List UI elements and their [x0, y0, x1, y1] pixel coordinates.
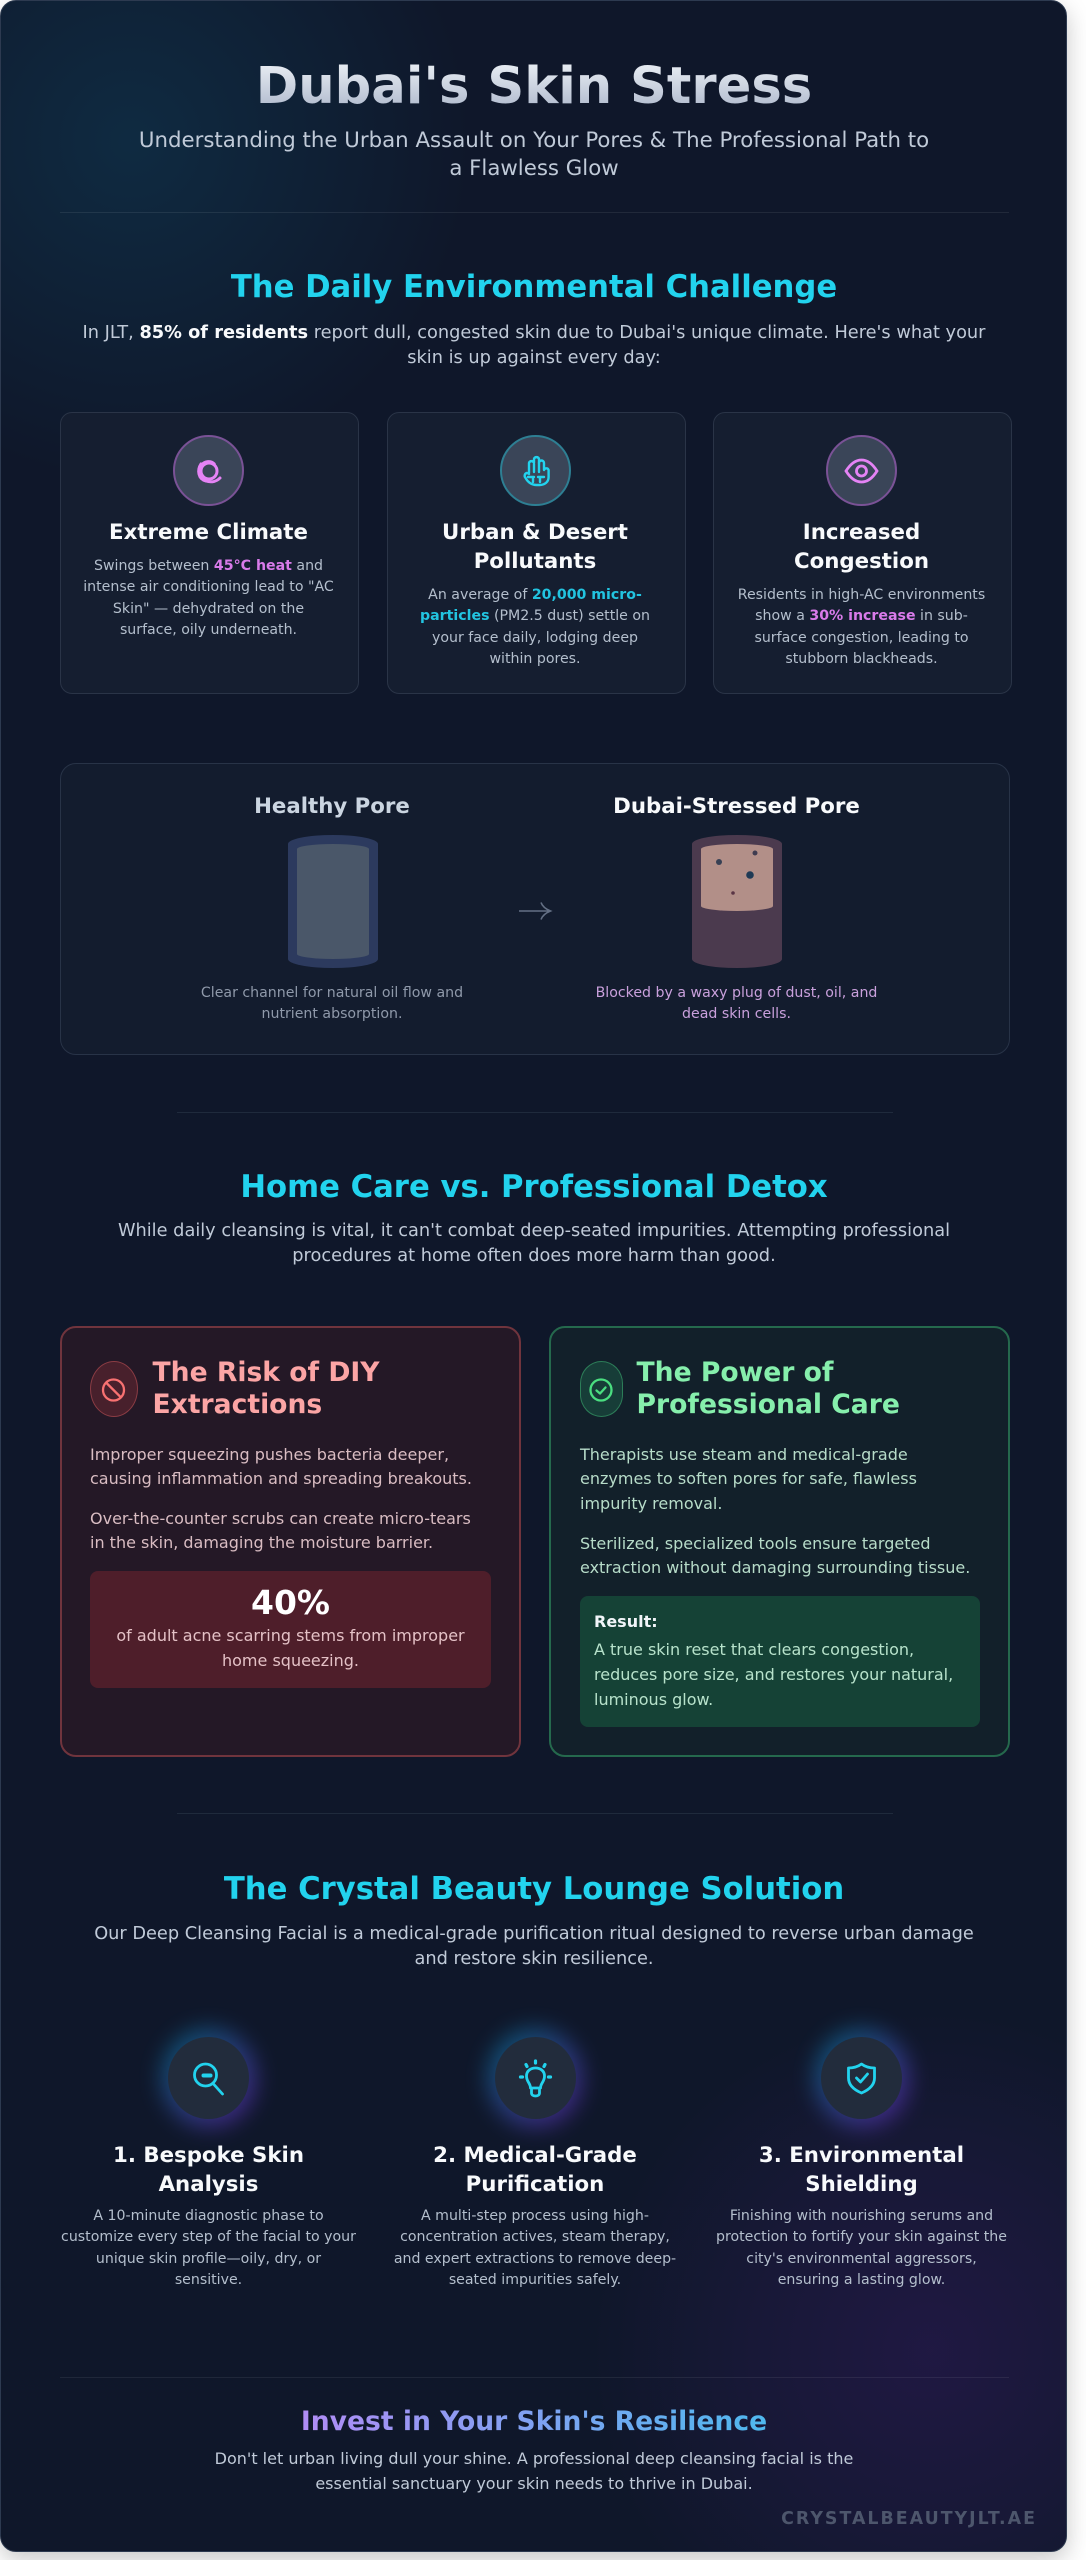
step 3: shielding — [716, 2016, 1007, 2288]
card text: Skin" — dehydrated on the — [113, 601, 304, 617]
paragraph: impurity removal. — [580, 1494, 722, 1513]
step text — [394, 2208, 676, 2288]
heading: home care vs professional: Home Care vs. Professional Detox — [240, 1170, 828, 1205]
step text: sensitive. — [175, 2272, 242, 2288]
card title: Urban & Desert — [442, 520, 628, 545]
panel: urban and desert pollutants — [386, 412, 686, 694]
paragraph: Over-the-counter scrubs can create micro-tears — [90, 1508, 471, 1528]
step title: Shielding — [805, 2172, 918, 2197]
step text: unique skin profile—oily, dry, or — [96, 2251, 321, 2267]
step text: ensuring a lasting glow. — [778, 2272, 945, 2288]
paragraph: causing inflammation and spreading breakouts. — [90, 1469, 472, 1488]
result text: A true skin reset that clears congestion, — [594, 1640, 914, 1659]
intro text: solution — [94, 1924, 974, 1968]
paragraph: extraction without damaging surrounding tissue. — [580, 1558, 970, 1577]
caption: healthy pore — [201, 985, 463, 1022]
icon: shield — [821, 2037, 902, 2119]
card text: stubborn blackheads. — [785, 651, 938, 667]
icon: search — [168, 2037, 249, 2119]
heading: daily environmental challenge: The Daily Environmental Challenge — [231, 270, 837, 305]
waxy plug — [701, 844, 773, 911]
card title — [442, 520, 628, 574]
icon: light bulb — [494, 2037, 576, 2119]
stat text — [116, 1626, 465, 1670]
card text — [738, 587, 985, 667]
footer text: Don't let urban living dull your shine. A professional deep cleansing facial is the — [215, 2448, 853, 2468]
stat text: home squeezing. — [222, 1651, 359, 1670]
stat box — [90, 1571, 491, 1688]
paragraph — [580, 1444, 917, 1513]
paragraph — [580, 1534, 970, 1577]
footer text — [215, 2448, 853, 2492]
title: Dubai's Skin Stress — [256, 56, 812, 116]
paragraph: enzymes to soften pores for safe, flawless — [580, 1469, 917, 1488]
heading: healthy pore: Healthy Pore — [254, 794, 410, 819]
result box — [580, 1596, 980, 1727]
caption: stressed pore — [596, 985, 877, 1022]
paragraph — [90, 1444, 472, 1488]
card text — [83, 558, 334, 638]
step 1: analysis — [61, 2016, 356, 2288]
card text: Residents in high-AC environments — [738, 587, 985, 603]
card title: Increased — [803, 520, 920, 545]
card text: show a 30% increase in sub- — [755, 608, 968, 624]
panel: power of professional care — [549, 1326, 1010, 1757]
result text: luminous glow. — [594, 1690, 713, 1709]
heading — [636, 1356, 900, 1420]
subtitle: a Flawless Glow — [449, 156, 619, 181]
step title — [433, 2143, 637, 2197]
card title — [794, 520, 929, 574]
caption: stressed pore: dead skin cells. — [682, 1006, 791, 1022]
panel: pore comparison — [60, 763, 1010, 1055]
intro text: daily challenge — [82, 323, 986, 368]
card title: Congestion — [794, 549, 929, 574]
caption: healthy pore: nutrient absorption. — [262, 1006, 402, 1022]
intro text: home care — [118, 1221, 950, 1266]
icon: climate swirl — [173, 435, 244, 506]
dust particles — [716, 850, 758, 895]
panel: increased congestion — [713, 412, 1012, 694]
step text: concentration actives, steam therapy, — [400, 2229, 670, 2245]
website: CRYSTALBEAUTYJLT.AE — [781, 2508, 1037, 2528]
card text: surface, oily underneath. — [120, 622, 297, 638]
paragraph: Therapists use steam and medical-grade — [580, 1444, 908, 1464]
arrow — [519, 902, 552, 920]
heading: Extractions — [152, 1388, 322, 1420]
paragraph: Sterilized, specialized tools ensure targeted — [580, 1534, 930, 1552]
heading: Professional Care — [636, 1388, 900, 1420]
panel: extreme climate — [60, 412, 359, 694]
step title: 2. Medical-Grade — [433, 2143, 637, 2168]
card text: within pores. — [489, 651, 581, 667]
paragraph: Improper squeezing pushes bacteria deeper, — [90, 1444, 449, 1464]
footer text: essential sanctuary your skin needs to thrive in Dubai. — [315, 2474, 753, 2492]
step text: customize every step of the facial to your — [61, 2229, 356, 2245]
heading — [152, 1356, 380, 1420]
result text: reduces pore size, and restores your natural, — [594, 1665, 953, 1684]
step text: seated impurities safely. — [449, 2272, 621, 2288]
diagram: stressed pore — [692, 835, 782, 968]
icon: eye — [826, 435, 897, 506]
subtitle — [139, 128, 929, 181]
card text: surface congestion, leading to — [754, 630, 969, 646]
step text: A 10-minute diagnostic phase to — [93, 2208, 324, 2224]
icon: check — [580, 1361, 623, 1417]
step title: 1. Bespoke Skin — [113, 2143, 304, 2168]
paragraph — [90, 1508, 471, 1552]
result label: Result: — [594, 1612, 658, 1631]
step text: Finishing with nourishing serums and — [730, 2208, 993, 2224]
icon: prohibited — [90, 1361, 138, 1417]
card text: particles (PM2.5 dust) settle on — [420, 608, 650, 624]
icon: hand — [500, 435, 570, 506]
caption: stressed pore: Blocked by a waxy plug of dust, oil, and — [596, 985, 877, 1001]
step text: A multi-step process using high- — [421, 2208, 649, 2224]
step 2: purification — [394, 2016, 676, 2288]
step title: 3. Environmental — [759, 2143, 964, 2168]
heading: stressed pore: Dubai-Stressed Pore — [613, 794, 860, 819]
step text — [61, 2208, 356, 2288]
footer heading: Invest in Your Skin's Resilience — [301, 2406, 767, 2437]
heading: The Power of — [636, 1356, 833, 1388]
card text: Swings between 45°C heat and — [94, 558, 323, 574]
intro text: solution: and restore skin resilience. — [414, 1948, 654, 1968]
paragraph: in the skin, damaging the moisture barrier. — [90, 1533, 433, 1552]
heading: solution: The Crystal Beauty Lounge Solution — [224, 1872, 844, 1907]
diagram: healthy pore — [288, 835, 378, 968]
card title: Extreme Climate — [109, 520, 308, 545]
card text: your face daily, lodging deep — [432, 630, 638, 646]
step title: Analysis — [159, 2172, 258, 2197]
clear channel — [296, 844, 368, 959]
step text: protection to fortify your skin against the — [716, 2229, 1007, 2245]
intro text: daily challenge: In JLT, 85% of residents report dull, congested skin due to Dubai's unique climate. Here's what your — [82, 323, 985, 343]
card text: intense air conditioning lead to "AC — [83, 579, 334, 595]
intro text: home care: While daily cleansing is vital, it can't combat deep-seated impurities. Attempting professional — [118, 1221, 950, 1241]
intro text: home care: procedures at home often does more harm than good. — [292, 1246, 776, 1266]
heading: The Risk of DIY — [152, 1356, 380, 1388]
subtitle: Understanding the Urban Assault on Your Pores & The Professional Path to — [139, 128, 929, 153]
card title: Pollutants — [474, 549, 596, 574]
stat number: 40% — [251, 1583, 330, 1622]
step text — [716, 2208, 1007, 2288]
panel: risk of DIY extractions — [60, 1326, 521, 1757]
intro text: daily challenge: skin is up against every day: — [407, 348, 661, 368]
step text: and expert extractions to remove deep- — [394, 2251, 676, 2267]
caption: healthy pore: Clear channel for natural oil flow and — [201, 985, 463, 1001]
card text — [420, 587, 650, 667]
result text — [594, 1640, 953, 1709]
card text: An average of 20,000 micro- — [428, 587, 642, 603]
intro text: solution: Our Deep Cleansing Facial is a medical-grade purification ritual designed to reverse urban damage — [94, 1924, 974, 1944]
step text: city's environmental aggressors, — [746, 2251, 977, 2267]
stat text: of adult acne scarring stems from improper — [116, 1626, 465, 1645]
step title — [113, 2143, 304, 2197]
step title — [759, 2143, 964, 2197]
step title: Purification — [466, 2172, 604, 2197]
